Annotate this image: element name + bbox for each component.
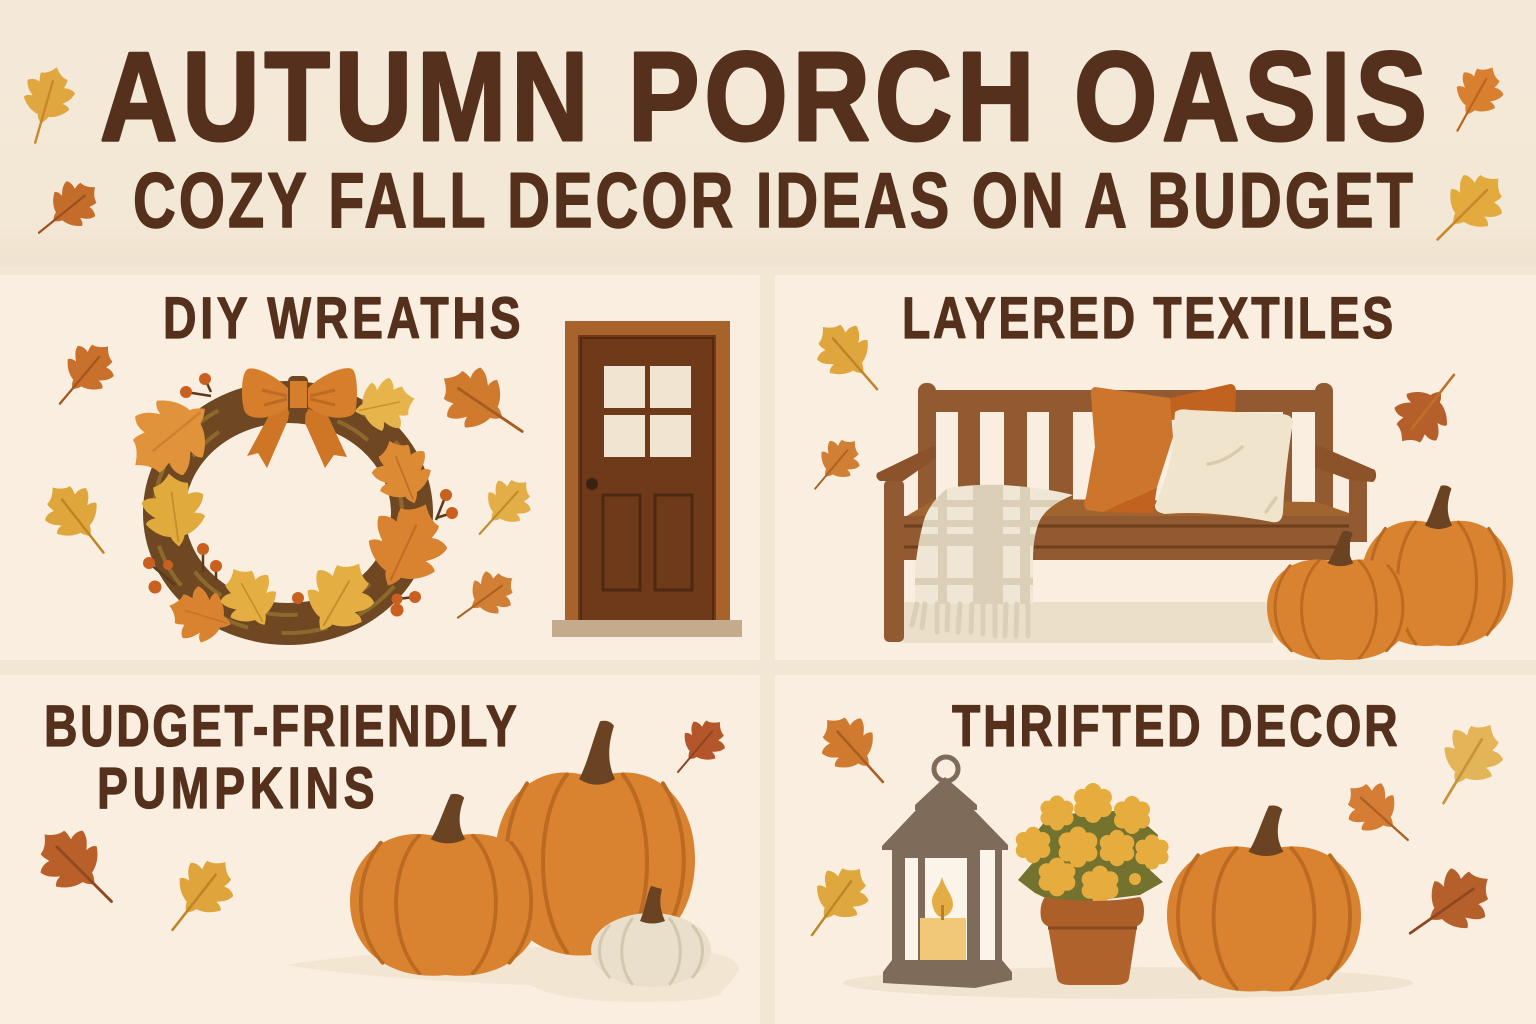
icon: header leaf top right [1438, 56, 1512, 142]
icon: leaf [1334, 770, 1424, 858]
icon: leaf [791, 854, 881, 950]
bench [876, 383, 1376, 642]
foliage [1018, 810, 1163, 905]
door knob [586, 478, 598, 490]
pot [1048, 926, 1137, 985]
plaid throw [912, 484, 1073, 636]
panel: DIY wreaths [0, 275, 760, 660]
heading: DIY wreaths: DIY WREATHS [163, 286, 521, 351]
candle [920, 918, 966, 960]
icon: leaf [803, 310, 897, 406]
icon: leaf [24, 814, 132, 922]
icon: leaf [42, 331, 126, 419]
heading: layered textiles: LAYERED TEXTILES [902, 286, 1393, 351]
icon: header leaf top left [12, 61, 80, 149]
heading: budget-friendly pumpkins: PUMPKINS [97, 756, 375, 821]
panel: layered textiles [775, 275, 1536, 660]
heading: budget-friendly pumpkins [44, 694, 517, 821]
door window [604, 366, 691, 457]
icon: leaf [151, 845, 247, 947]
door [552, 321, 742, 637]
icon: leaf [463, 467, 543, 549]
icon: leaf [1419, 710, 1515, 818]
pumpkin large [495, 721, 695, 955]
lantern [882, 757, 1012, 988]
icon: header leaf bottom left [25, 170, 109, 250]
wreath leaves [111, 374, 460, 650]
icon: leaf [445, 561, 525, 635]
potted plant [1016, 783, 1169, 985]
flame [932, 877, 953, 917]
icon: leaf [1393, 855, 1505, 957]
icon: leaf [1381, 359, 1475, 457]
icon: leaf [32, 472, 124, 568]
door step [552, 620, 742, 637]
pumpkin medium [350, 794, 542, 976]
floor shadow [903, 602, 1273, 643]
white pumpkin [591, 886, 711, 987]
wreath [111, 368, 460, 650]
title: AUTUMN PORCH OASIS [100, 26, 1427, 167]
bow [242, 368, 357, 468]
flowers [1016, 783, 1169, 904]
cream pillow [1155, 409, 1293, 522]
pumpkin large [1361, 485, 1513, 646]
icon: leaf [662, 709, 736, 785]
icon: leaf [427, 354, 539, 456]
subtitle: COZY FALL DECOR IDEAS ON A BUDGET [133, 156, 1413, 244]
icon: header leaf bottom right [1419, 160, 1517, 258]
header band [0, 0, 1536, 266]
icon: leaf [808, 702, 902, 800]
orange pillow [1084, 384, 1236, 513]
pumpkin [1167, 805, 1361, 991]
heading: thrifted decor: THRIFTED DECOR [952, 694, 1398, 759]
panel: thrifted decor [775, 675, 1536, 1024]
heading: budget-friendly pumpkins: BUDGET-FRIENDLY [44, 694, 517, 759]
icon: leaf [800, 429, 870, 501]
panel: budget-friendly pumpkins [0, 675, 760, 1024]
ground shadow [285, 947, 739, 1002]
berries [143, 373, 458, 616]
ground shadow [843, 967, 1413, 999]
pumpkin small [1267, 531, 1411, 660]
